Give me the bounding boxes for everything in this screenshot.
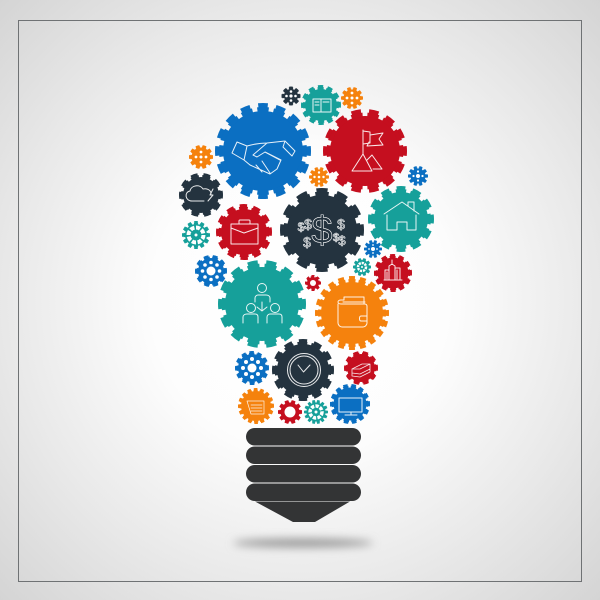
gear: blue left lower <box>236 352 268 384</box>
icon: dollar signs: $ <box>338 233 346 248</box>
gear: red briefcase <box>218 206 270 258</box>
icon: people hierarchy <box>243 284 282 323</box>
gear: blue right <box>409 167 427 185</box>
gear: blue small <box>365 241 381 257</box>
gear: orange wallet <box>317 278 387 348</box>
icon: monitor <box>339 398 362 415</box>
gear: dark dollar <box>282 190 362 270</box>
gear: orange top <box>342 88 362 108</box>
icon: dollar signs: $ <box>298 220 305 234</box>
icon: wallet <box>338 297 367 327</box>
gear: red ring <box>279 401 301 423</box>
icon: dollar signs <box>298 210 346 252</box>
gear: teal house <box>370 188 432 250</box>
gear: blue handshake <box>217 105 309 197</box>
icon: book <box>313 99 331 112</box>
gear: orange mid <box>310 168 328 186</box>
icon: book stack <box>352 364 370 377</box>
icon: house <box>384 202 419 230</box>
gear: orange left <box>190 146 212 168</box>
gear: dark clock <box>274 340 332 400</box>
gear: red small <box>306 276 320 290</box>
gear: red books <box>345 352 377 384</box>
icon: cloud and lightning <box>186 186 213 201</box>
gear: orange document <box>239 389 273 423</box>
shadow <box>233 538 373 548</box>
gear: teal spoked <box>305 401 327 423</box>
gear: teal people <box>220 262 304 346</box>
gear: teal wheel <box>183 222 209 248</box>
icon: dollar signs: $ <box>333 232 339 244</box>
gear: teal small <box>354 259 370 275</box>
icon: buildings <box>384 260 402 280</box>
icon: dollar signs: $ <box>303 234 311 250</box>
icon: clock <box>288 354 320 386</box>
gear: dark cloud <box>180 174 222 216</box>
gear: blue monitor <box>331 385 369 423</box>
gear: teal book <box>302 86 340 124</box>
icon: dollar signs: $ <box>337 216 345 232</box>
gear: blue left <box>196 256 226 286</box>
icon: handshake <box>232 141 295 174</box>
icon: document <box>247 401 264 414</box>
gear: red flag <box>325 111 405 191</box>
icon: briefcase <box>231 220 258 244</box>
gear: dark small top <box>282 87 300 105</box>
icon: dollar signs: $ <box>304 216 312 232</box>
icon: flag on mountain <box>352 130 383 171</box>
gear: red buildings <box>375 255 411 291</box>
bulb base <box>246 428 361 522</box>
icon: dollar signs: $ <box>311 210 333 252</box>
